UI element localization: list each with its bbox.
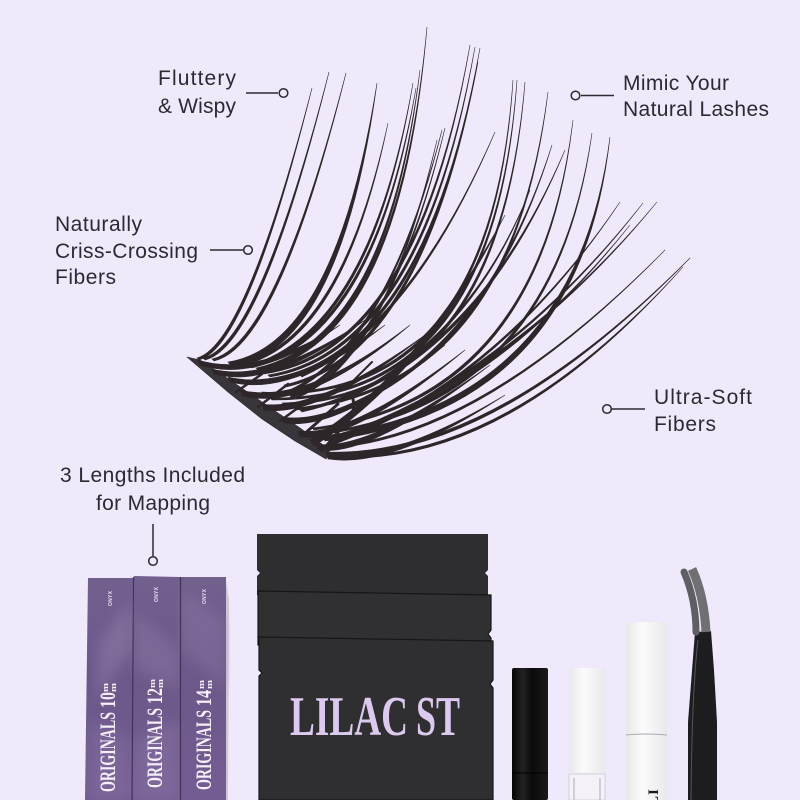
box: 14mm: m	[197, 680, 206, 689]
callout: naturally criss-crossing fibers: Fibers	[55, 266, 116, 289]
box: 10mm: ONYX	[108, 590, 114, 606]
box: 10mm: ORIGINALS	[95, 712, 120, 792]
logo: LILAC	[290, 686, 408, 748]
box: 12mm: ONYX	[154, 586, 160, 602]
callout: mimic your natural lashes: Mimic Your	[623, 72, 729, 95]
box: 10mm	[85, 578, 133, 800]
box: 14mm: ONYX	[202, 588, 208, 604]
box: 14mm: ORIGINALS	[191, 710, 216, 790]
logo: ST	[416, 686, 460, 748]
tweezers	[684, 569, 717, 800]
mascara-style black tube	[512, 668, 548, 800]
box: 12mm: m	[148, 679, 157, 688]
callout: naturally criss-crossing fibers: Naturally	[55, 213, 142, 236]
lash base web	[187, 320, 505, 460]
box: 12mm: m	[156, 679, 165, 688]
callout: ultra-soft fibers: Ultra-Soft	[654, 386, 752, 409]
box: 12mm: 12	[142, 688, 167, 704]
box: 10mm: m	[109, 683, 118, 692]
clear bond bottle with white cap	[569, 668, 605, 800]
box: 10mm: 10	[95, 692, 120, 708]
box: 14mm: 14	[191, 690, 216, 706]
box: 14mm: m	[205, 680, 214, 689]
box: 12mm	[132, 576, 180, 800]
lash boxes	[85, 576, 229, 800]
box: 12mm: ORIGINALS	[142, 708, 167, 788]
callout: ultra-soft fibers	[603, 386, 752, 436]
pouch: front	[259, 637, 493, 800]
callout: fluttery and wispy	[158, 67, 288, 118]
pouch: middle	[258, 591, 491, 645]
callout: three lengths included: 3 Lengths Included	[60, 464, 245, 487]
pouch: back	[257, 534, 488, 595]
white tube	[626, 622, 667, 800]
callout: three lengths included: for Mapping	[96, 492, 210, 515]
box separators	[132, 577, 180, 800]
box: 10mm: m	[101, 683, 110, 692]
lash fibers: right cluster	[312, 120, 690, 458]
callout: three lengths included	[60, 464, 245, 565]
box: 14mm	[180, 577, 229, 800]
callout: ultra-soft fibers: Fibers	[654, 413, 716, 436]
callout: mimic your natural lashes	[571, 72, 769, 121]
callout: naturally criss-crossing fibers: Criss-Crossing	[55, 240, 198, 263]
lash fibers: left cluster	[197, 27, 427, 370]
callout: naturally criss-crossing fibers	[55, 213, 252, 289]
callout: mimic your natural lashes: Natural Lashes	[623, 98, 769, 121]
callout: fluttery and wispy: Fluttery	[158, 67, 236, 90]
black pouches with logo	[257, 534, 493, 800]
callout: fluttery and wispy: & Wispy	[158, 95, 236, 118]
lash cluster illustration	[187, 27, 690, 460]
lash fibers: middle cluster	[262, 45, 565, 446]
